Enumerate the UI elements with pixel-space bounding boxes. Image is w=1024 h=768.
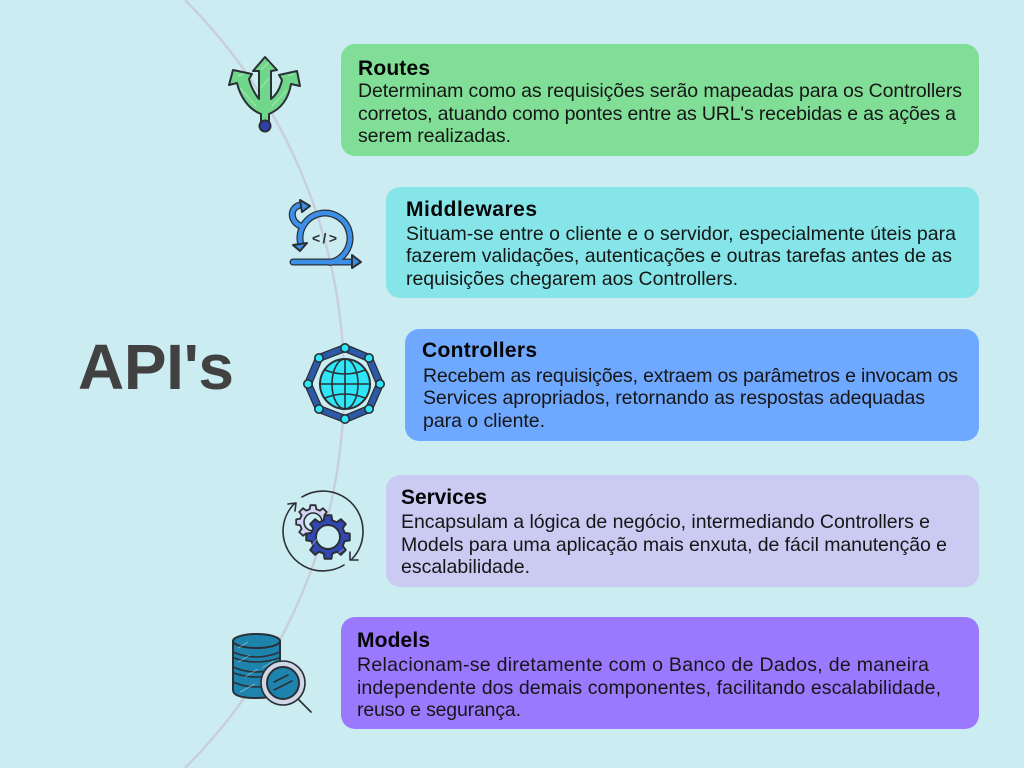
text: middlewares description [406,223,956,290]
text: services description: Encapsulam a lógica de negócio, intermediando Controllers e [401,511,930,533]
text: middlewares description: Situam-se entre o cliente e o servidor, especialmente úteis para [406,223,956,245]
text: middlewares description: fazerem validações, autenticações e outras tarefas antes de as [406,245,952,267]
title: API's [78,331,234,403]
text: controllers description: para o cliente. [423,410,545,432]
panel: controllers [405,329,979,441]
text: routes description: Determinam como as requisições serão mapeadas para os Controllers [358,80,962,102]
text: routes description: serem realizadas. [358,125,511,147]
panel: services [386,475,979,587]
text: models description [357,654,941,721]
heading: routes: Routes [358,57,430,80]
text: controllers description: Recebem as requisições, extraem os parâmetros e invocam os [423,365,958,387]
icon: middleware cycle [292,200,361,268]
icon: routes arrows [229,57,300,132]
panel: middlewares [386,187,979,298]
text: services description [401,511,947,578]
text: models description: reuso e segurança. [357,699,521,721]
text: routes description [358,80,962,147]
text: controllers description [423,365,958,432]
text: services description: escalabilidade. [401,556,530,578]
panel: models [341,617,979,729]
text: routes description: corretos, atuando como pontes entre as URL's recebidas e as ações a [358,103,956,125]
heading: services: Services [401,486,487,509]
heading: middlewares: Middlewares [406,198,537,221]
icon: models database [233,634,311,712]
heading: models: Models [357,629,430,652]
heading: controllers: Controllers [422,339,537,362]
icon: services gears [283,491,363,571]
text: services description: Models para uma aplicação mais enxuta, de fácil manutenção e [401,534,947,556]
icon: middleware cycle: </> [312,230,337,246]
text: middlewares description: requisições chegarem aos Controllers. [406,268,738,290]
icon: controllers globe [304,344,384,423]
text: controllers description: Services apropriados, retornando as respostas adequadas [423,387,925,409]
panel: routes [341,44,979,156]
text: models description: independente dos demais componentes, facilitando escalabilidade, [357,677,941,699]
text: models description: Relacionam-se diretamente com o Banco de Dados, de maneira [357,654,929,676]
